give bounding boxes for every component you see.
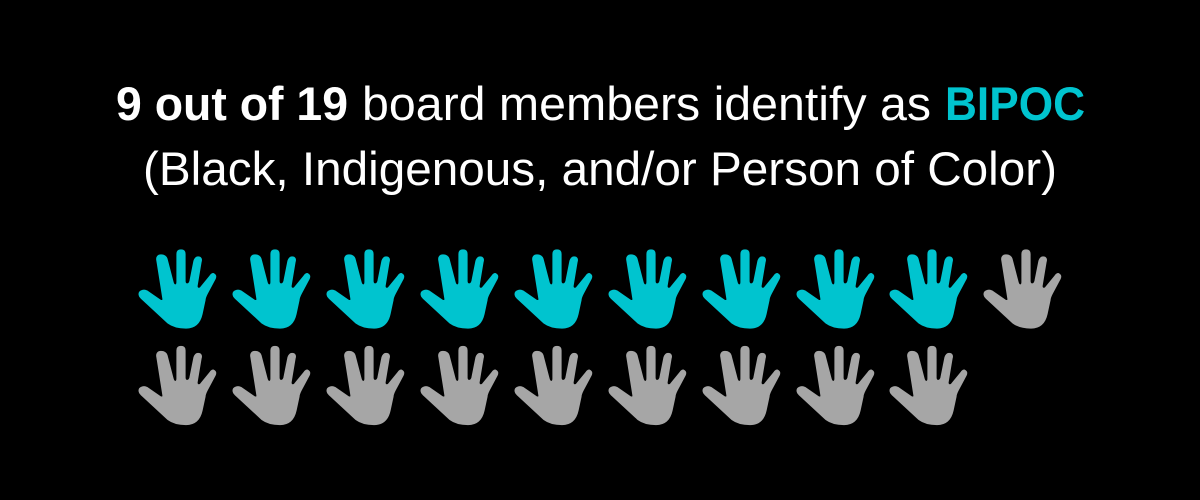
icon: teal hand 9 <box>890 250 967 328</box>
icon: gray hand 12 <box>233 346 310 424</box>
headline middle: board members identify as <box>362 78 931 131</box>
icon: gray hand 10 <box>984 250 1061 328</box>
headline line 2: (Black, Indigenous, and/or Person of Color) <box>143 143 1057 196</box>
icon: gray hand 19 <box>890 346 967 424</box>
icon: teal hand 8 <box>797 250 874 328</box>
icon: teal hand 7 <box>703 250 780 328</box>
BIPOC highlight: BIPOC <box>945 78 1085 131</box>
pictogram: 19 hands <box>139 250 1061 424</box>
icon: teal hand 6 <box>609 250 686 328</box>
icon: gray hand 11 <box>139 346 216 424</box>
bold count: 9 out of 19 <box>116 78 348 131</box>
icon: gray hand 16 <box>609 346 686 424</box>
icon: gray hand 15 <box>515 346 592 424</box>
headline line 1 <box>116 78 1085 131</box>
icon: teal hand 5 <box>515 250 592 328</box>
icon: teal hand 4 <box>421 250 498 328</box>
icon: teal hand 2 <box>233 250 310 328</box>
icon: teal hand 1 <box>139 250 216 328</box>
icon: teal hand 3 <box>327 250 404 328</box>
icon: gray hand 13 <box>327 346 404 424</box>
icon: gray hand 14 <box>421 346 498 424</box>
icon: gray hand 18 <box>797 346 874 424</box>
icon: gray hand 17 <box>703 346 780 424</box>
title <box>116 78 1085 196</box>
